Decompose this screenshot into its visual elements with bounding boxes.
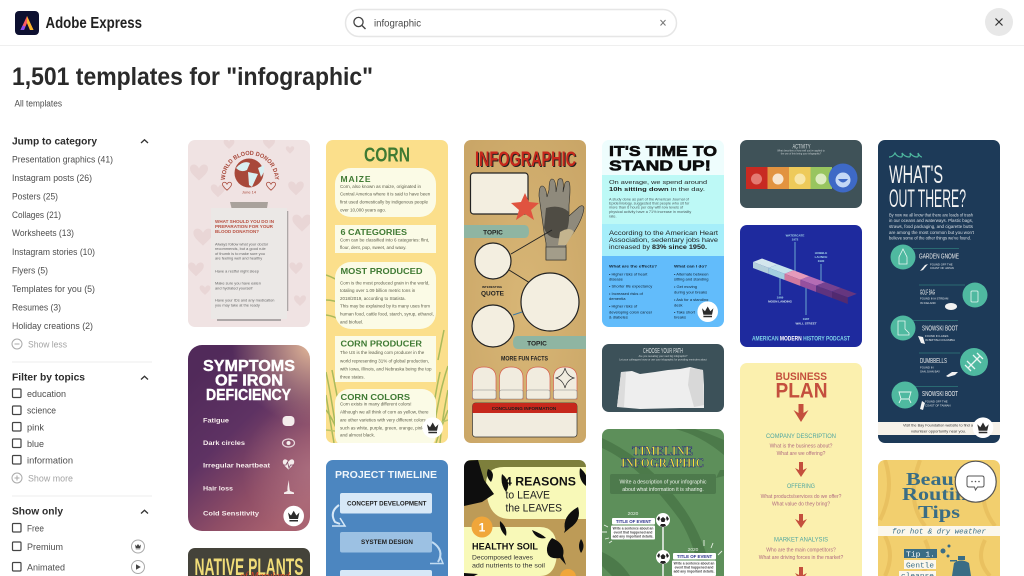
panel: corn producer: CORN PRODUCER [340,340,422,348]
item: snowski boot two: COAST OF TAIWAN [925,404,951,408]
isometric timeline bar [753,258,857,304]
heading: IT'S TIME TO [609,143,717,160]
item: golf bag: IN ICELAND [920,301,936,305]
heading: Routine [902,484,977,504]
stems [780,242,821,315]
section: market analysis: MARKET ANALYSIS [774,538,828,544]
intro text: more than 6 hours per day with low levels of [609,206,684,210]
timeline event two [656,547,716,576]
column: effects: • Shorter life expectancy [609,284,652,288]
step: concept development: CONCEPT DEVELOPMENT [347,502,427,508]
column: what can i do [674,263,709,320]
event labels: WALL STREET [795,322,817,326]
panel: corn colors: Although we all think of corn as yellow, there [340,409,429,414]
panel: 6 categories: flour, dent, pop, sweet, and waxy. [340,245,406,250]
section: market analysis: Who are the main competitors? [766,548,836,554]
description banner [610,474,716,494]
template card: world blood donor day [188,140,310,327]
section: company description: What is the business about? [770,444,833,450]
section: company description [766,434,836,457]
intro text: A study done as part of the American Journal of [609,197,690,201]
sidebar filters [12,136,152,574]
panel: jump to category: Instagram stories (10) [12,247,95,258]
brand name: Adobe Express [46,15,142,32]
item: garden gnome: GARDEN GNOME [919,252,959,260]
item: golf bag: GOLF BAG [920,288,935,296]
panel: corn colors: Corn exists in many different colors! [340,402,411,407]
column: what can i do: • Get moving [674,284,697,289]
section: company description: What are we offering? [777,451,826,457]
timeline event two: 2020 [688,547,699,553]
heading: WHAT'S [889,161,943,189]
icon: Adobe Express logo [15,11,39,35]
symptom icons [282,416,294,494]
topic banner left [464,225,529,238]
heading [621,443,704,470]
step: system design: SYSTEM DESIGN [361,540,413,546]
panel: heading: 4 REASONS [505,474,576,488]
heading [203,358,295,404]
paper note: BLOOD DONATION? [215,229,259,234]
heading: PLAN [776,380,828,402]
panel: corn producer: three states. [340,374,365,379]
panel: jump to category: Jump to category [12,136,97,148]
close button [985,8,1013,36]
intro text: Epidemiology, suggested that people who sit for [609,202,690,206]
panel: jump to category [12,136,148,350]
heading [776,371,828,402]
tip labels: Tip 1. [906,552,935,560]
event labels [768,234,827,326]
fact tiles [472,367,577,399]
section: company description: COMPANY DESCRIPTION [766,434,836,440]
column: effects: disease [609,276,624,281]
more fun facts heading: MORE FUN FACTS [501,356,549,362]
panel: filter by topics: science [27,406,56,416]
timeline event one: event that happened and [614,530,652,534]
heading: STAND UP! [609,158,711,174]
intro text: rate. [609,214,617,218]
timeline event two: add any important details. [674,570,715,574]
panel: maize: first used domestically by indigenous people [340,200,429,204]
panel: jump to category: Templates for you (5) [12,284,95,295]
timeline event one: add any important details. [613,534,654,538]
torn paper [617,367,704,409]
template card: it's time to stand up [602,140,724,327]
intro text: straws, food packaging, and cigarette butts [889,224,973,229]
event labels: 1990 [818,259,825,263]
subtitle band: for hot & dry weather [892,528,986,536]
top navigation bar [0,8,1024,46]
event labels: HUBBLE [815,251,827,255]
panel: filter by topics: blue [27,439,44,450]
event labels: WATERGATE [786,234,804,238]
panel: most produced: Corn is the most produced grain in the world, [340,280,430,285]
panel: corn colors: are other varieties with very different colors [340,417,426,422]
tip labels: Gentle [906,562,934,570]
panel: corn colors: such as white, purple, green, orange, pink, [340,425,425,430]
panel: jump to category: Worksheets (13) [12,228,74,239]
panel: healthy soil: add nutrients to the soil [472,564,545,570]
quote label: QUOTE [481,290,505,298]
panel: heading [486,467,586,519]
intro text [889,212,975,240]
description banner: about what information it is sharing. [622,487,704,493]
column: what can i do: sitting and standing [674,276,708,281]
template card: beauty routine tips [878,460,1000,576]
icon: red star [511,193,539,220]
column: what can i do: • Take short [674,310,696,314]
panel: jump to category: Holiday creations (2) [12,321,93,332]
diagram circles [472,243,579,347]
column: what can i do: • Alternate between [674,272,709,276]
item: snowski boot: IN BRITISH COLUMBIA [925,338,955,342]
heading: ACTIVITY [792,144,811,150]
panel: jump to category: Posters (25) [12,191,58,202]
column: effects: • Higher risks of [609,304,638,308]
heading [902,469,977,522]
event labels: 1972 [792,238,799,242]
panel: show only: Animated [27,562,65,574]
panel: heading: to LEAVE [506,490,550,502]
footer band: Visit the Bay Foundation website to find a [903,422,974,428]
timeline event two: event that happened and [675,566,713,570]
item: snowski boot: SNOWSKI BOOT [922,324,958,332]
paper note: PREPARATION FOR YOUR [215,224,274,229]
template card: symptoms of iron deficiency [188,345,310,531]
column: effects: • Increased risks of [609,291,644,296]
concluding information box: CONCLUDING INFORMATION [492,406,557,411]
template card: 4 reasons to leave the leaves [464,460,586,576]
globe illustration [234,158,264,188]
panel: corn colors: and almost black. [340,432,375,437]
panel: 6 categories: 6 CATEGORIES [340,228,408,237]
template card: activity mood scale [740,140,862,208]
timeline event one: TITLE OF EVENT [616,519,652,524]
template card: world blood donor day: June 14 [242,190,257,194]
intro text: By now we all know that there are loads of trash [889,212,974,218]
section: offering: OFFERING [787,484,815,490]
panel: corn colors: CORN COLORS [340,393,411,402]
timeline event one: Write a sentence about an [613,526,653,530]
item: snowski boot two: FOUND OFF THE [925,400,948,404]
template card: choose your path: Are you revealing your next big infographic? [639,355,688,358]
paper note [211,208,288,321]
panel: most produced: MOST PRODUCED [340,266,422,276]
event labels: LAUNCH [815,255,827,259]
icon: rake and leaves [464,460,587,576]
panel: healthy soil: HEALTHY SOIL [472,542,539,552]
column: what can i do: • Ask for a standing [674,297,708,302]
paper note: Always follow what your doctor [215,242,269,246]
column: effects: What are the effects? [609,263,658,268]
panel: most produced [335,262,436,329]
template card: project timeline [326,460,448,576]
panel: most produced: and biofuel. [340,319,363,324]
quote label: INTERESTING [482,285,503,289]
heading: Beauty [906,469,972,489]
heading [889,161,966,213]
item: garden gnome: FOUND OFF THE [930,262,953,266]
timeline event two: TITLE OF EVENT [677,554,712,559]
column: effects: • Higher risks of heart [609,272,648,276]
panel: corn producer [335,336,436,382]
panel: filter by topics: education [27,389,66,400]
column: what can i do: breaks [674,315,686,320]
item: snowski boot two [892,382,958,410]
template card: corn [326,140,448,443]
event labels: MOON LANDING [768,300,793,304]
arrows [794,404,808,576]
panel: corn producer: world representing 31% of global production, [340,358,429,363]
description banner: Write a description of your infographic [620,480,707,486]
timeline event one [611,511,670,540]
icon: perfume bottle [940,544,971,576]
tip labels [899,549,937,576]
panel: filter by topics: Filter by topics [12,372,85,384]
icon: premium crown [283,506,304,526]
panel: show only: Premium [27,542,63,553]
heading [609,143,717,174]
template card: what's out there [878,140,1000,443]
symptom list: Hair loss [203,486,233,492]
intro text: 10h sitting down in the day. [609,187,705,193]
panel: show only: Show only [12,506,63,518]
footer band: volunteer opportunity near you. [911,428,966,434]
footer band [878,422,1000,435]
item: snowski boot [890,316,958,344]
mood scale [746,164,858,192]
panel: corn producer: with Iowa, Illinois, and Nebraska being the top [340,366,432,371]
template card: timeline infographic [602,429,724,576]
item: snowski boot: FOUND IN LAKES [925,334,948,338]
paper note: of thumb is to make sure you [215,251,265,256]
paper note: Have your IDs and any medication [215,298,274,302]
panel: jump to category: Presentation graphics (41) [12,154,113,165]
paper note: Make sure you have eaten [215,280,261,286]
section: offering: What value do they bring? [772,502,830,508]
event labels: 1987 [803,317,810,321]
panel: maize: over 10,000 years ago. [340,208,386,212]
heading: BUSINESS [776,371,827,383]
column: effects [609,263,658,320]
paper note: and hydrated yourself [215,286,253,290]
column: effects: dementia [609,296,626,301]
section: offering: What products/services do we offer? [761,494,842,500]
statistic text: Association, sedentary jobs have [609,238,719,244]
template card: activity mood scale: What describes of how well you've applied to [777,150,825,152]
icon: premium crown [697,301,718,322]
symptom list: Fatigue [203,418,229,424]
concluding information box [472,403,577,437]
heading: SYMPTOMS [203,358,295,375]
breadcrumb: all templates: All templates [14,98,62,108]
intro text: are among the most common but you won't [889,230,975,235]
panel: jump to category: Flyers (5) [12,265,48,276]
quote label [481,285,505,298]
search box: infographic [374,18,421,30]
intro text [609,180,707,218]
panel: healthy soil [464,516,557,576]
intro text: physical activity have a 71% increase in mortality [609,210,691,214]
grass decoration [326,275,448,443]
panel: show only: Free [27,524,44,534]
panel: jump to category: Instagram posts (26) [12,173,92,184]
panel: filter by topics: Show more [28,474,73,484]
template card: project timeline: PROJECT TIMELINE [335,469,437,481]
timeline event one: 2020 [628,511,639,517]
symptom list: Irregular heartbeat [203,462,271,470]
arrow: step two to three [430,542,443,564]
column: what can i do: during your breaks [674,289,707,294]
panel: filter by topics: information [27,456,73,466]
column: effects: & diabetes [609,315,628,320]
panel: heading: the LEAVES [506,502,562,514]
item: dumbbells: FOUND IN [920,366,934,370]
symptom list: Dark circles [203,440,246,447]
heading: OF IRON [215,372,283,390]
arc heading: WORLD BLOOD DONOR DAY [220,150,280,180]
icon: hand [539,179,584,260]
panel: filter by topics [12,372,148,484]
search box [346,10,676,36]
panel: maize: MAIZE [340,174,371,184]
intro text: On average, we spend around [609,180,707,186]
item: garden gnome [890,244,959,271]
timeline event two: Write a sentence about an [674,562,714,566]
panel: jump to category: Show less [28,340,67,350]
panel: maize: Central America where it is said to have been [340,192,431,196]
paper note: Have a restful night sleep [215,268,259,274]
panel: 6 categories: Corn can be classified into 6 categories: flint, [340,238,429,243]
panel: most produced: human food, cattle food, starch, syrup, ethanol, [340,311,434,316]
template card: infographic with hand [464,140,586,443]
column: what can i do: desk [674,302,682,308]
panel: jump to category: Resumes (3) [12,302,61,313]
heading: INFOGRAPHIC [621,455,704,470]
panel: healthy soil: 1 [479,520,486,534]
panel: maize: Corn, also known as maize, originated in [340,184,422,189]
panel: maize [335,168,436,217]
heading: Tips [918,502,960,522]
arrow: step one to two [332,505,345,526]
symptom list: Cold Sensitivity [203,510,260,518]
column: effects: developing colon cancer [609,309,653,314]
statistic text: According to the American Heart [609,231,718,237]
icon: premium crown [422,417,443,438]
topic banner right: TOPIC [527,340,547,348]
item: golf bag: FOUND IN A STREAM [920,296,949,300]
intro text: believe some of the other things we've found. [889,236,971,240]
icon: premium crown [973,417,993,438]
panel: healthy soil: Decomposed leaves [472,556,533,562]
paper note: you may take at the ready [215,302,260,308]
panel: most produced: totaling over 1.09 billion metric tons in [340,288,416,293]
heading: CHOOSE YOUR PATH [643,346,683,355]
intro text: in our oceans and waterways. Plastic bags, [889,218,973,223]
template card: activity mood scale: the use of this being your infographic? [781,152,822,156]
item: snowski boot two: SNOWSKI BOOT [922,389,958,398]
chat support button [954,460,997,503]
paper note: are feeling well and healthy [215,256,262,260]
panel: most produced: This may be explained by its many uses from [340,303,430,308]
item: dumbbells: SAN JUAN BAY [920,370,940,374]
template card: american modern history podcast [740,225,862,347]
column: what can i do: What can I do? [674,263,708,268]
symptom list [203,418,271,518]
statistic text: increased by 83% since 1950. [609,245,707,251]
section: market analysis [759,538,843,561]
heading: TIMELINE [632,443,693,458]
panel: filter by topics: pink [27,422,44,434]
panel: corn colors [335,389,436,449]
panel: most produced: 2018/2019, according to Statista. [340,296,406,301]
item: dumbbells [919,348,988,377]
topic banner left: TOPIC [483,230,503,236]
heading: DEFICIENCY [206,387,291,404]
item: golf bag [919,282,988,310]
statistic text [609,231,719,251]
panel: 6 categories [335,225,436,253]
paper note: recommends, but a good rule [215,246,266,251]
template card: choose your path [602,344,724,412]
section: market analysis: What are driving forces in the market? [759,555,843,561]
paper note: WHAT SHOULD YOU DO IN [215,219,275,224]
heading: CORN [364,144,410,166]
panel: show only [12,506,148,574]
event labels: 1969 [777,296,784,300]
panel: corn producer: The US is the leading corn producer in the [340,350,425,355]
section: offering [761,484,842,508]
item: garden gnome: COAST OF JAPAN [930,266,954,270]
topic banner right [513,336,586,349]
template card: business plan [740,363,862,576]
template card: choose your path: Let your colleagues know or use your infographic for providing reminders about [619,358,707,362]
panel: jump to category: Collages (21) [12,210,61,221]
item: dumbbells: DUMBBELLS [920,356,947,365]
icon: hearts [222,182,276,190]
